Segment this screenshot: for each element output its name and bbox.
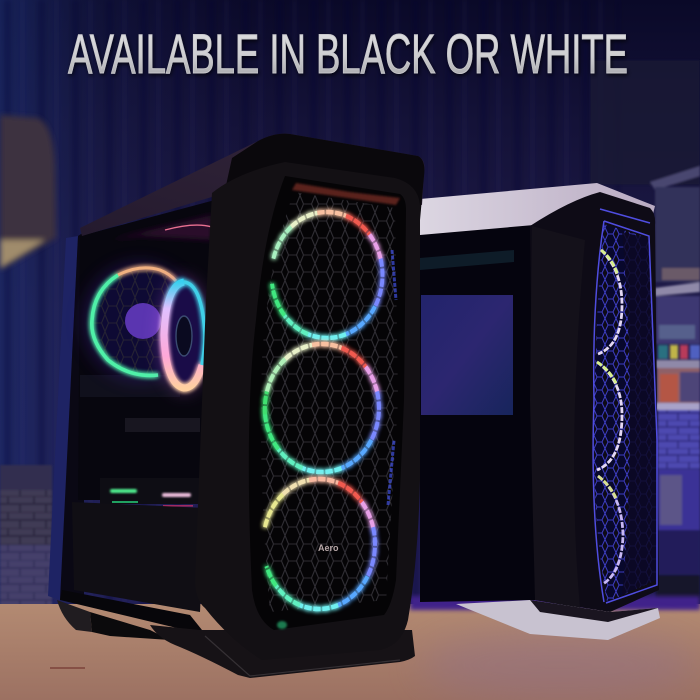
- black case top edge highlight: [165, 225, 212, 230]
- front fan ring bottom: [265, 479, 375, 609]
- front mesh grille: [261, 192, 398, 612]
- white case top panel: [420, 183, 655, 235]
- black case front inner frame: [249, 176, 406, 630]
- floor lamp shade: [0, 115, 56, 270]
- graphics card light bars: [100, 478, 200, 507]
- black PC case: [48, 134, 424, 678]
- black case lower shroud: [72, 502, 205, 612]
- white case fan rings: [597, 250, 623, 584]
- front right side reflection: [388, 250, 396, 505]
- black case bottom rail: [60, 590, 206, 635]
- black case left frame: [48, 236, 78, 600]
- black case front foot: [150, 625, 415, 678]
- black case side window interior: [78, 200, 215, 500]
- side fan glow: [82, 262, 198, 382]
- side radiator mesh: [80, 375, 180, 397]
- front top reflection: [292, 183, 400, 205]
- side fan hub: [125, 303, 161, 339]
- shelves on right: [590, 60, 700, 605]
- white case side body: [420, 222, 535, 602]
- black case front body: [195, 162, 420, 660]
- white case mesh grille: [594, 224, 657, 602]
- white PC case: [420, 183, 660, 640]
- front fan ring middle: [265, 344, 379, 472]
- radiator fan ring: [164, 282, 205, 388]
- radiator fan body: [165, 284, 203, 386]
- radiator fan glow: [158, 277, 210, 393]
- logo: Aero: [318, 543, 339, 553]
- wooden table: [0, 596, 700, 700]
- white case inner shelf: [420, 250, 514, 270]
- black case top panel: [80, 134, 424, 236]
- white case front body: [530, 192, 659, 612]
- stone wall left: [0, 465, 52, 608]
- white case window screen: [421, 295, 513, 415]
- white case front shadow side: [530, 226, 585, 608]
- black case rear foot: [57, 600, 92, 632]
- white case blue edge lights: [593, 209, 657, 603]
- front fan ring top: [272, 212, 383, 338]
- side fan ring: [92, 268, 176, 375]
- white case base: [456, 600, 660, 640]
- side fan body: [90, 270, 194, 374]
- front status light: [277, 621, 287, 629]
